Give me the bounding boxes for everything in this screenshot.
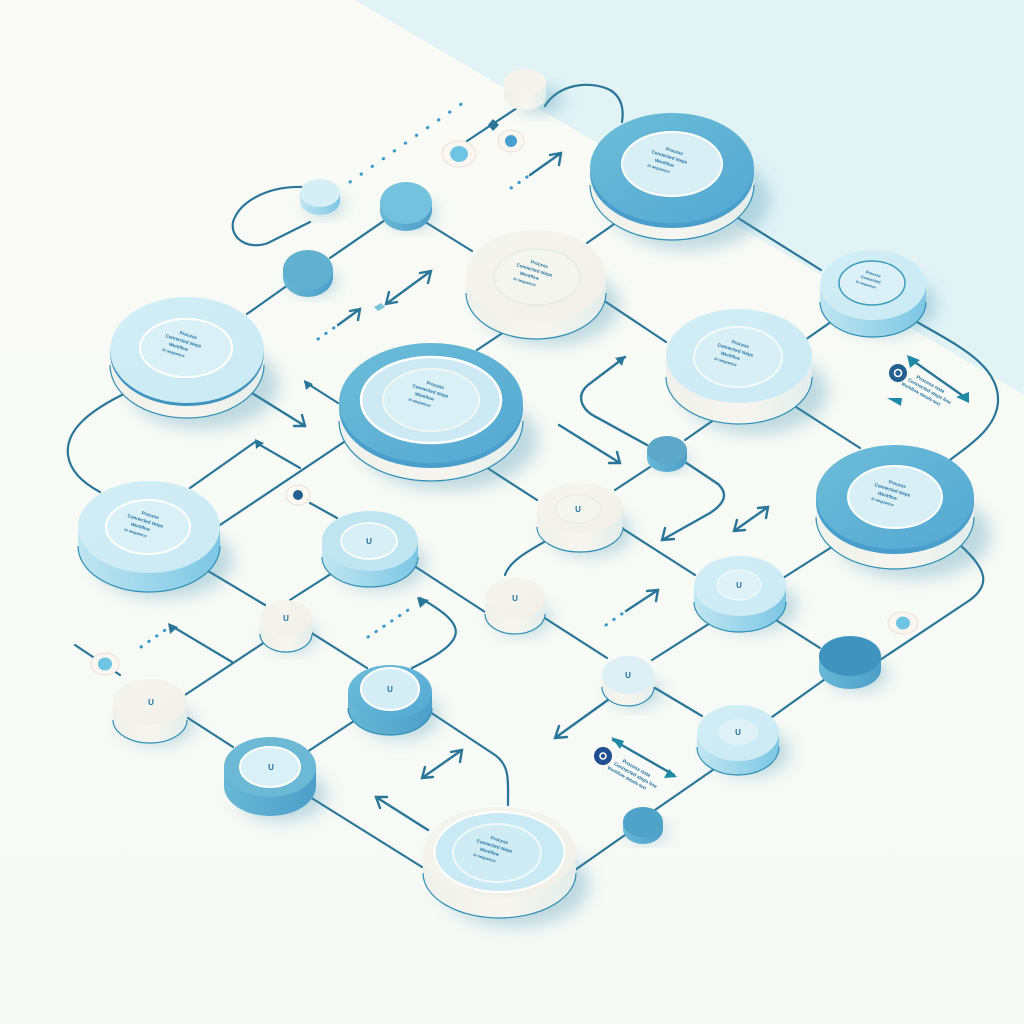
node: pale lower right small	[697, 705, 790, 776]
node text	[161, 326, 204, 362]
dotted trail near arrow top	[511, 175, 530, 188]
icon: pin lower right	[888, 612, 918, 634]
node label: U	[736, 581, 742, 590]
node text: Connected steps	[127, 513, 164, 529]
arrow: lower left of small node	[555, 697, 612, 738]
arrowhead: curved middle	[417, 597, 429, 608]
connector lines	[68, 85, 998, 870]
dotted trail lower left	[141, 628, 168, 647]
node: top cream cylinder	[504, 69, 564, 114]
node text: Connected steps	[165, 333, 202, 349]
node: teal stacked	[348, 665, 440, 739]
node text	[408, 376, 451, 412]
node: cream centre	[537, 483, 632, 556]
node text	[512, 255, 555, 291]
node: small teal	[380, 182, 437, 231]
callout: upper right note	[887, 355, 969, 411]
icon: note badge	[889, 364, 907, 382]
node label: U	[625, 671, 631, 680]
dotted trail middle	[368, 606, 414, 637]
node text: in sequence	[647, 163, 671, 174]
node text	[713, 335, 756, 371]
node text: Process	[426, 380, 445, 390]
node text: in sequence	[473, 852, 497, 864]
node: small blue	[283, 250, 338, 297]
callout: lower note	[594, 737, 677, 795]
node text: Connected	[860, 274, 882, 285]
node text	[472, 831, 515, 867]
node text: Workflow	[130, 522, 151, 532]
arrowhead: left branch	[168, 623, 178, 634]
node: pale right	[820, 250, 937, 337]
node: dark blue right	[819, 636, 888, 691]
node text: Connected steps	[874, 482, 911, 498]
node label: U	[512, 594, 518, 603]
node: small blue bottom	[623, 807, 667, 844]
node text: in sequence	[871, 496, 895, 508]
node text: in sequence	[408, 397, 432, 408]
node label: U	[283, 614, 289, 623]
node text: Workflow	[479, 847, 500, 857]
node: blue lower left	[224, 737, 327, 821]
node text: in sequence	[162, 347, 186, 359]
node text: Workflow	[654, 158, 675, 168]
node: large bottom	[423, 807, 589, 927]
lower note text: Connected steps line	[613, 761, 658, 790]
arrowhead: left centre peak	[255, 439, 264, 449]
node: small cream left	[260, 600, 317, 652]
node text: in sequence	[513, 276, 537, 288]
background corner panel	[355, 0, 1024, 395]
node text: Workflow	[720, 351, 741, 361]
node text: Connected steps	[412, 383, 449, 399]
node: small blue junction	[647, 436, 690, 472]
node text: Process	[888, 479, 907, 489]
icon: lower note badge	[594, 747, 612, 765]
arrow: double headed upper left	[386, 271, 431, 304]
node text: in sequence	[855, 280, 876, 290]
node text: Workflow	[414, 391, 435, 402]
node label: U	[268, 763, 274, 772]
dotted trail top	[350, 100, 467, 182]
node text	[123, 506, 166, 542]
node text	[870, 475, 913, 511]
node label: U	[148, 698, 154, 707]
icon: pin top left	[442, 141, 476, 167]
note arrowhead	[887, 398, 902, 406]
node text: Process	[179, 330, 198, 340]
node label: U	[735, 728, 741, 737]
lower note text: Process note	[621, 759, 652, 779]
node: small pale top left	[300, 179, 345, 216]
arrow: upper, up right	[530, 153, 561, 175]
note text: Workflow details text	[900, 381, 942, 407]
lower note text	[606, 754, 661, 795]
node: pale left large	[110, 297, 279, 429]
arrow: double headed bottom	[422, 750, 462, 778]
lower note text: Workflow details text	[606, 765, 648, 791]
arrowhead: centre disc upper left	[304, 380, 313, 390]
node: pale lower right	[694, 556, 797, 632]
node text: Process	[865, 269, 882, 279]
node: pale left centre	[322, 511, 426, 590]
node: central large blue	[339, 343, 538, 490]
note double arrow	[907, 355, 969, 403]
note text: Connected steps line	[907, 377, 952, 406]
node text: Process	[490, 835, 509, 845]
small diamond marker	[374, 303, 385, 311]
node label: U	[387, 685, 393, 694]
node text: Process	[141, 510, 160, 520]
node label: U	[366, 537, 372, 546]
arrow: lower right up	[626, 590, 658, 611]
note text	[900, 370, 955, 411]
node: pale left	[78, 481, 233, 598]
node: small pale mid	[602, 656, 662, 707]
node label: U	[575, 505, 581, 514]
node text: Connected steps	[717, 342, 754, 358]
icon: pin lower left	[91, 653, 119, 675]
node text: Workflow	[877, 491, 898, 501]
arrow: curved return	[662, 462, 724, 540]
node text: Process	[530, 259, 549, 269]
node: big blue top right	[590, 113, 770, 250]
node: small cream centre	[485, 578, 551, 635]
arrow: curved down to node	[581, 356, 647, 445]
node text: Workflow	[519, 271, 540, 281]
dotted trail left	[318, 325, 338, 339]
arrow: double headed right	[734, 507, 768, 531]
arrow: small up right	[338, 309, 360, 325]
arrow: centre right	[559, 425, 620, 463]
node text: Process	[731, 339, 750, 349]
node text: Workflow	[168, 342, 189, 352]
lower note arrow	[611, 737, 677, 778]
node: pale right centre	[666, 309, 828, 434]
node text: Connected steps	[516, 262, 553, 278]
node text: Connected steps	[651, 149, 688, 165]
note text: Process note	[915, 375, 946, 395]
node text: in sequence	[124, 527, 148, 539]
arrow: bottom up left	[376, 797, 428, 830]
node: big blue right	[816, 445, 991, 579]
diamond on line top	[488, 119, 499, 131]
node text	[647, 142, 690, 178]
icon: pin top right	[498, 130, 524, 152]
node text: Process	[665, 146, 684, 156]
node text: in sequence	[714, 356, 738, 368]
node text: Connected steps	[476, 838, 513, 854]
arrow: from left disc down right	[247, 390, 305, 426]
dotted trail lower right	[606, 611, 626, 625]
node text	[855, 267, 884, 291]
icon: pin left	[286, 485, 310, 505]
node: cream lower left	[113, 679, 194, 744]
node: cream upper centre	[466, 230, 620, 345]
